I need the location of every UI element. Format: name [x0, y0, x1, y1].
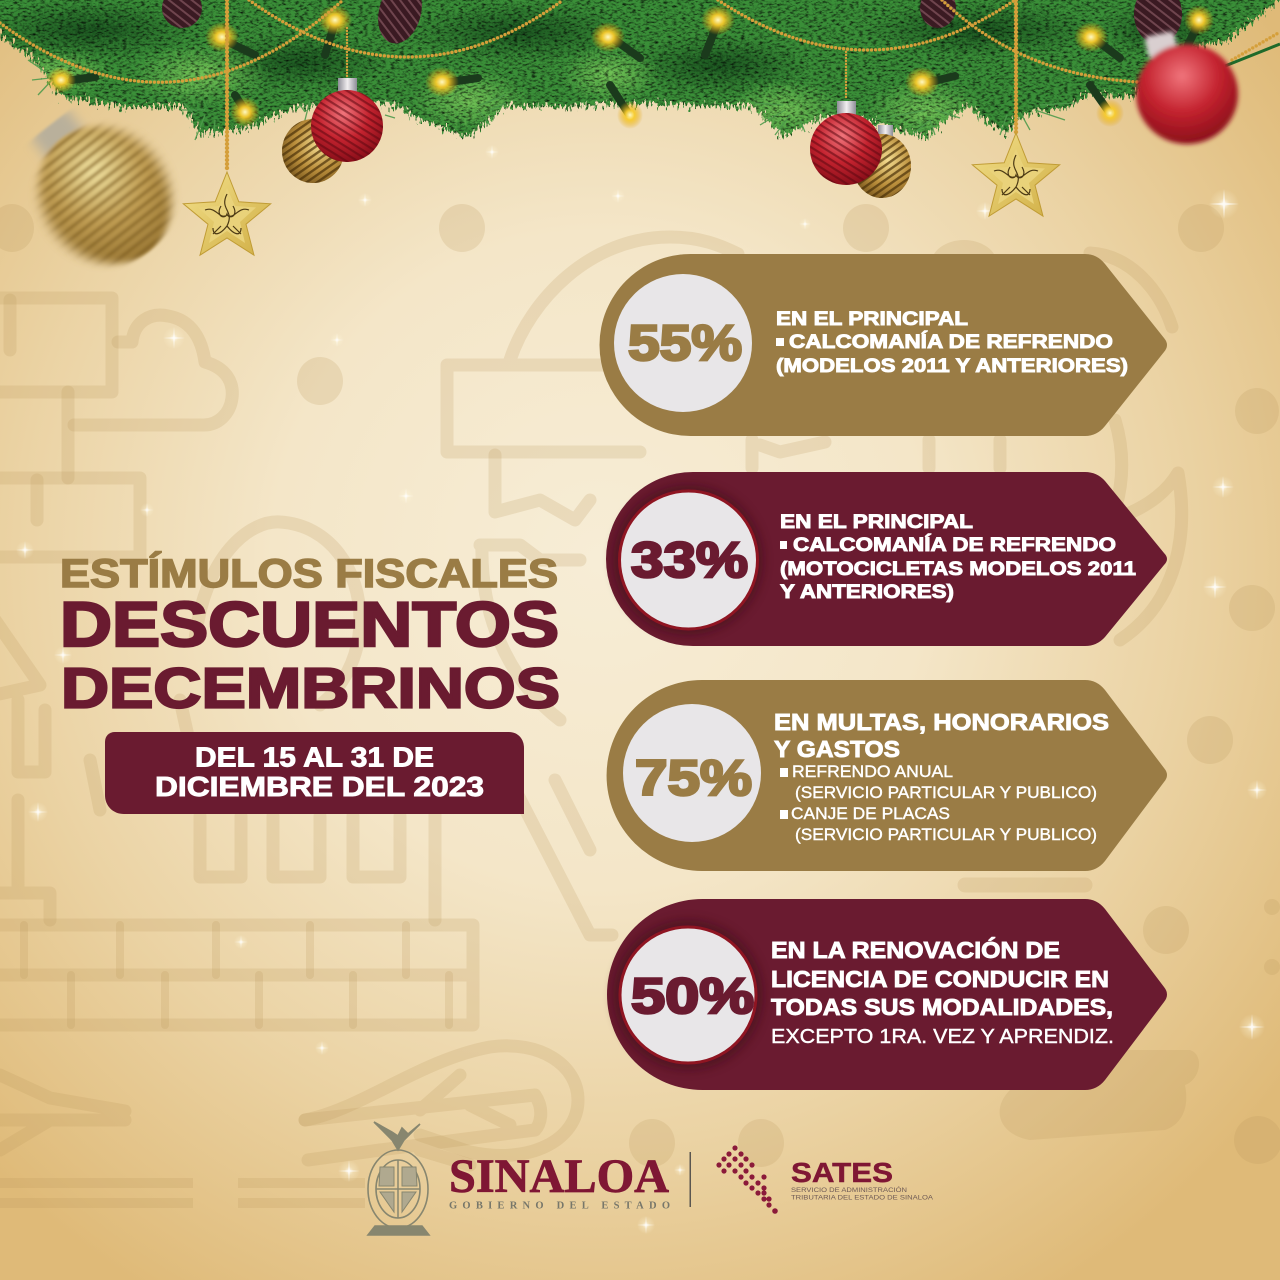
panel: 50% — [607, 899, 1167, 1090]
panel: 50%: 50% — [631, 968, 754, 1024]
pine cones — [162, 0, 1182, 48]
red ornament left — [311, 78, 383, 162]
panel: 75%: (SERVICIO PARTICULAR Y PUBLICO) — [795, 784, 1097, 802]
heading — [60, 551, 560, 720]
panel: 33%: 33% — [631, 532, 748, 588]
panel: 55%: EN EL PRINCIPAL — [776, 309, 968, 330]
logo: Sinaloa wordmark: SINALOA — [449, 1150, 669, 1203]
heading: DECEMBRINOS — [61, 656, 560, 720]
panel: 33%: CALCOMANÍA DE REFRENDO — [793, 534, 1116, 556]
panel: 33%: EN EL PRINCIPAL — [780, 512, 973, 533]
blurred gold ornament — [1, 87, 198, 290]
panel: 55%: 55% — [628, 315, 742, 371]
logo: SATES wordmark: SERVICIO DE ADMINISTRACIÓN — [791, 1185, 907, 1194]
divider — [690, 1152, 691, 1207]
panel: 50%: EXCEPTO 1RA. VEZ Y APRENDIZ. — [771, 1026, 1114, 1048]
panel: 75%: REFRENDO ANUAL — [792, 763, 953, 781]
panel: 33% — [606, 472, 1167, 646]
gold star left — [183, 172, 271, 255]
gold ornament right — [853, 125, 911, 198]
panel: 75%: Y GASTOS — [774, 736, 900, 762]
green wire — [1225, 44, 1280, 66]
logo: SATES wordmark — [791, 1157, 934, 1202]
gold ornament left — [282, 119, 344, 183]
panel: 33%: (MOTOCICLETAS MODELOS 2011 — [780, 559, 1136, 580]
red ornament right — [810, 101, 882, 185]
background line-art motifs — [0, 237, 1182, 1203]
date banner: DEL 15 AL 31 DE — [195, 742, 434, 772]
panel: 75%: (SERVICIO PARTICULAR Y PUBLICO) — [795, 826, 1097, 844]
panel: 75%: EN MULTAS, HONORARIOS — [774, 709, 1109, 735]
panel: 50%: LICENCIA DE CONDUCIR EN — [771, 966, 1109, 992]
panel: 50%: TODAS SUS MODALIDADES, — [771, 994, 1113, 1020]
gold star right — [972, 133, 1060, 216]
gold bead chains — [0, 0, 1280, 172]
blurred red ornament — [1136, 31, 1238, 144]
logo: SATES wordmark: SATES — [791, 1157, 893, 1188]
panel: 75%: 75% — [635, 750, 752, 806]
heading line: estimulos fiscales: ESTÍMULOS FISCALES — [60, 551, 558, 596]
logo: SATES wordmark: TRIBUTARIA DEL ESTADO DE SINALOA — [791, 1194, 934, 1202]
panel: 55% — [600, 254, 1167, 436]
logo: Sinaloa coat of arms — [368, 1122, 429, 1235]
panel: 55%: CALCOMANÍA DE REFRENDO — [789, 331, 1113, 353]
panel: 55%: (MODELOS 2011 Y ANTERIORES) — [776, 356, 1128, 377]
date banner: DICIEMBRE DEL 2023 — [155, 771, 484, 802]
logo: SATES dotted mark — [716, 1145, 778, 1214]
date banner — [105, 732, 524, 814]
background dots — [0, 204, 1280, 1167]
panel: 75%: CANJE DE PLACAS — [791, 805, 950, 823]
pine garland — [0, 0, 1280, 150]
pine needle sprigs — [28, 60, 1075, 140]
panel: 75% — [607, 680, 1167, 871]
panel: 50%: EN LA RENOVACIÓN DE — [771, 936, 1060, 963]
logo: Sinaloa wordmark: GOBIERNO DEL ESTADO — [449, 1200, 670, 1212]
panel: 33%: Y ANTERIORES) — [780, 582, 954, 603]
heading: DESCUENTOS — [60, 590, 559, 660]
string lights — [46, 5, 1214, 129]
